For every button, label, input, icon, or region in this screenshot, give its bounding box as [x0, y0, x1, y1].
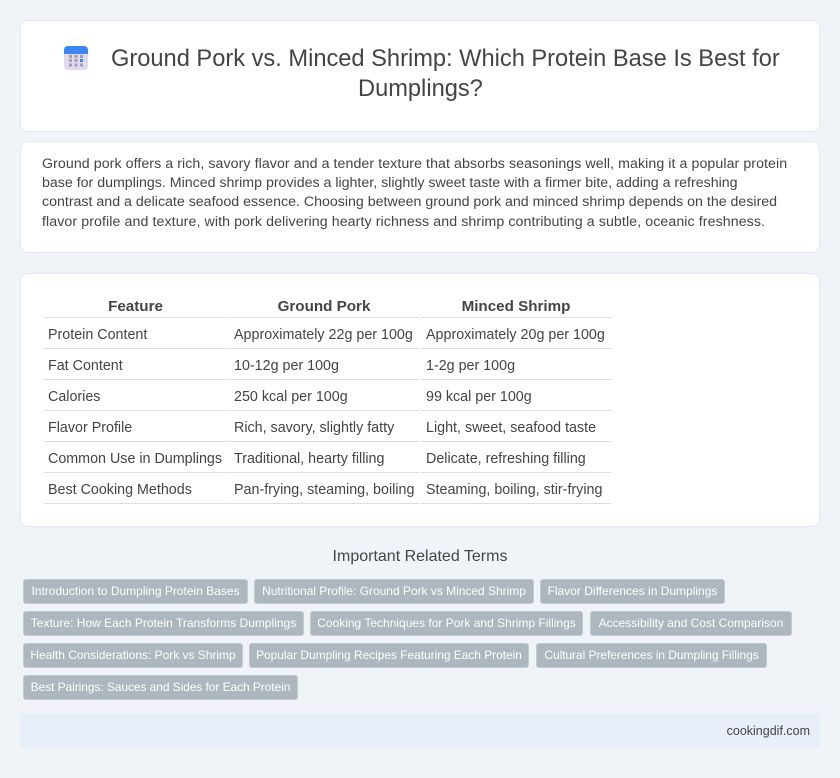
tag: Health Considerations: Pork vs Shrimp [30, 648, 236, 662]
row: calories: Calories [48, 389, 100, 405]
footer bar [20, 714, 820, 748]
text block: intro paragraph: flavor profile and texture, with pork delivering hearty richness and shrimp contributing a subtle, oceanic freshness. [42, 214, 765, 230]
row: cooking methods: Pan-frying, steaming, boiling [234, 482, 414, 498]
row: flavor profile [48, 420, 596, 436]
table header: Minced Shrimp [462, 298, 570, 315]
row: common use: Traditional, hearty filling [234, 451, 384, 467]
row: common use: Common Use in Dumplings [48, 451, 222, 467]
tag: Popular Dumpling Recipes Featuring Each Protein [256, 648, 522, 662]
tag: Cultural Preferences in Dumpling Fillings [544, 648, 759, 662]
row: fat content: 10-12g per 100g [234, 358, 339, 374]
row: calories [48, 389, 532, 405]
tag [310, 611, 583, 636]
row: cooking methods [48, 482, 602, 498]
row: flavor profile: Rich, savory, slightly fatty [234, 420, 394, 436]
row: calories: 250 kcal per 100g [234, 389, 348, 405]
tag [23, 579, 248, 604]
text block: intro paragraph: base for dumplings. Minced shrimp provides a lighter, slightly sweet taste with a firmer bite, adding a refreshing [42, 175, 738, 191]
row: flavor profile: Light, sweet, seafood taste [426, 420, 596, 436]
tag: Accessibility and Cost Comparison [599, 616, 783, 630]
row: common use: Delicate, refreshing filling [426, 451, 586, 467]
title: Ground Pork vs. Minced Shrimp: Which Protein Base Is Best for [111, 46, 780, 72]
tag [540, 579, 725, 604]
tag [254, 579, 534, 604]
panel: intro text [20, 141, 820, 253]
row: common use [48, 451, 586, 467]
tag [23, 675, 298, 700]
icon: calendar [64, 46, 88, 70]
row: protein content: Approximately 22g per 100g [234, 327, 413, 343]
related term tags [23, 579, 792, 700]
text block: intro paragraph [42, 156, 787, 230]
table header: Ground Pork [278, 298, 370, 315]
row: flavor profile: Flavor Profile [48, 420, 132, 436]
tag: Best Pairings: Sauces and Sides for Each Protein [31, 680, 290, 694]
table header [108, 298, 570, 315]
footer source: cookingdif.com [727, 724, 810, 738]
tag: Introduction to Dumpling Protein Bases [31, 584, 240, 598]
tag: Flavor Differences in Dumplings [548, 584, 717, 598]
tag [23, 611, 304, 636]
row: protein content: Approximately 20g per 100g [426, 327, 605, 343]
tag: Texture: How Each Protein Transforms Dumplings [31, 616, 296, 630]
title: Dumplings? [358, 76, 483, 102]
panel: header [20, 20, 820, 132]
title [111, 46, 780, 102]
tag: Cooking Techniques for Pork and Shrimp Fillings [317, 616, 576, 630]
row: calories: 99 kcal per 100g [426, 389, 532, 405]
row: fat content [48, 358, 515, 374]
tag [23, 643, 243, 668]
row: fat content: 1-2g per 100g [426, 358, 515, 374]
row: protein content: Protein Content [48, 327, 147, 343]
text block: intro paragraph: Ground pork offers a rich, savory flavor and a tender texture that absorbs seasonings well, making it a popular protein [42, 156, 787, 172]
row: cooking methods: Best Cooking Methods [48, 482, 192, 498]
heading: related terms: Important Related Terms [333, 548, 507, 565]
table header: Feature [108, 298, 163, 315]
comparison table [44, 298, 611, 504]
row: cooking methods: Steaming, boiling, stir-frying [426, 482, 602, 498]
tag [536, 643, 767, 668]
row: fat content: Fat Content [48, 358, 123, 374]
row: protein content [48, 327, 605, 343]
tag [249, 643, 529, 668]
tag: Nutritional Profile: Ground Pork vs Minced Shrimp [262, 584, 526, 598]
panel: comparison table [20, 273, 820, 527]
text block: intro paragraph: contrast and a delicate seafood essence. Choosing between ground pork and minced shrimp depends on the desired [42, 194, 777, 210]
tag [590, 611, 792, 636]
